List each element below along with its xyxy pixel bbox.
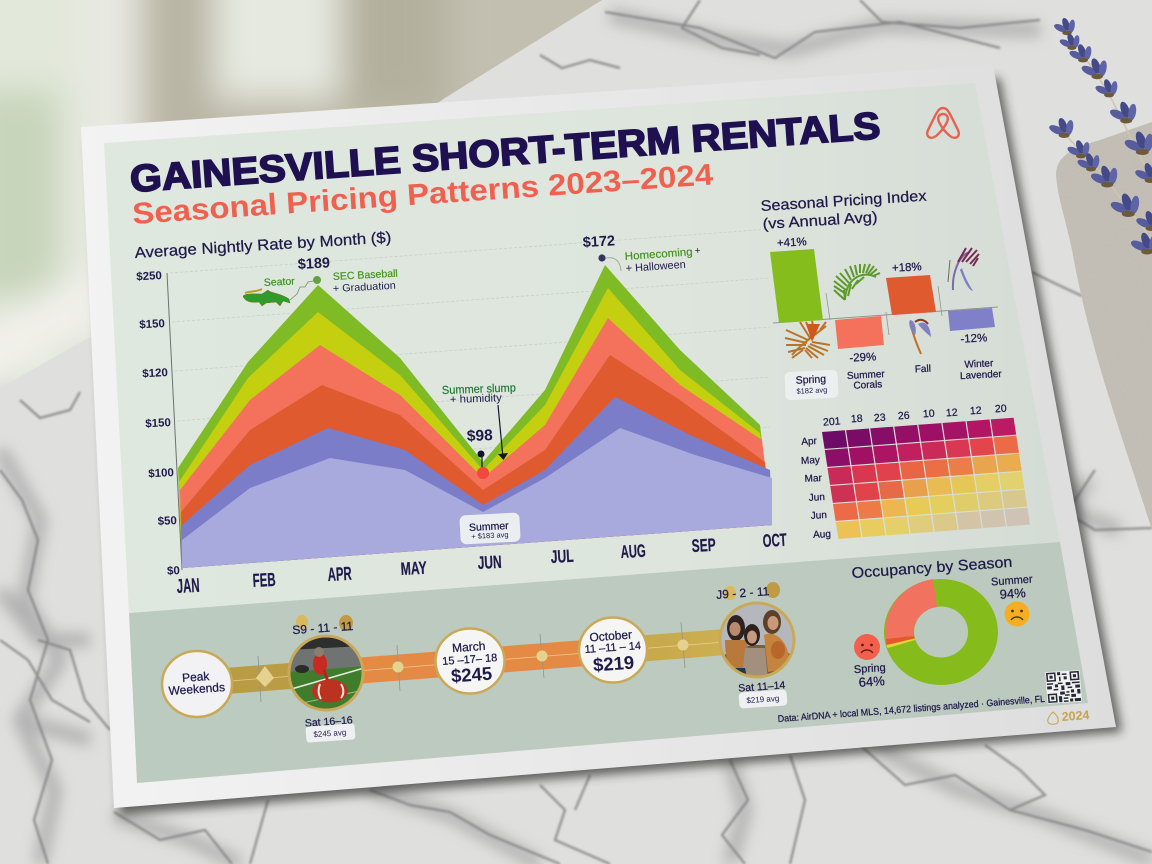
month labels: JUL [550,546,574,567]
date chip: sat 16–16: $245 avg [313,728,347,739]
layer: periwinkle [182,397,772,568]
label: winter lavender [960,358,1003,382]
year badge [1048,708,1090,724]
label: spring chip [784,370,839,400]
annotation: april peak: SEC Baseball [333,268,398,283]
month labels: SEP [691,535,716,556]
label: summer corals: Corals [853,379,883,392]
heatmap row labels [801,436,831,541]
month labels: OCT [762,530,787,551]
y-axis labels [136,270,180,578]
heatmap column labels [823,403,1007,429]
date chip: sat 11–14 [738,679,787,709]
annotation: april peak: Seator [264,275,296,289]
annotation: august peak [582,233,701,275]
bar: fall [886,275,936,315]
heatmap row labels: Aug [813,529,831,541]
icon: fall orchid [909,320,931,354]
icon: lavender feather [948,248,979,291]
peak weekends timeline [162,582,796,743]
background: lavender sprigs [1048,17,1152,254]
subtitle: Seasonal Pricing Patterns 2023–2024 [131,158,714,231]
node: march: 15 –17– 18 [442,652,498,668]
month labels: JAN [176,575,200,598]
poster sheet [81,65,1116,808]
date chip: sat 16–16: Sat 16–16 [304,714,353,730]
year badge: 2024 [1061,708,1090,724]
layer: coral [180,318,772,568]
y-axis labels: $150 [139,318,165,331]
callout: summer [459,512,521,545]
bar value labels: +41% [777,236,807,250]
icon: orange palm [785,321,830,358]
node: peak weekends: Peak [182,669,211,685]
icon: airbnb logo [927,108,959,138]
bar: summer [835,316,884,349]
label: summer occupancy [991,574,1033,626]
label: spring occupancy: 64% [858,673,886,690]
heatmap cells [822,418,1030,539]
bar value labels [777,236,988,365]
label: spring chip: $182 avg [796,385,828,396]
chart heading: seasonal pricing index [760,188,927,233]
y-axis labels: $50 [157,515,177,528]
qr code [1045,670,1082,704]
month labels: AUG [620,541,646,562]
label: spring occupancy [854,634,886,690]
label: summer corals: Summer [847,369,886,382]
annotation: june dip: Summer slump [442,382,516,397]
node: football photo [286,632,366,711]
annotation: june dip: + humidity [450,392,503,406]
node: march: March [452,639,486,655]
annotation: august peak: + Halloween [625,259,686,275]
node: october: $219 [592,652,635,675]
heatmap column labels: 26 [898,410,910,422]
bar: winter [948,308,995,331]
heatmap column labels: 18 [851,413,863,425]
annotation: june dip: $98 [467,427,493,445]
heatmap column labels: 20 [995,403,1007,415]
heatmap [801,403,1030,541]
bar value labels: -29% [849,351,877,365]
date label: friends weekend: J9 - 2 - 11 [716,584,770,602]
donut chart: occupancy by season [884,579,998,685]
callout: summer: Summer [469,520,509,534]
chart heading: seasonal pricing index: (vs Annual Avg) [762,209,878,233]
node: march [436,628,504,694]
label: summer occupancy: 94% [999,585,1027,602]
upper panel background [104,83,1060,613]
date chip: sat 11–14: $219 avg [746,694,780,705]
heatmap column labels: 12 [946,407,958,419]
y-axis labels: $250 [136,270,162,283]
title: GAINESVILLE SHORT-TERM RENTALS [129,105,882,201]
heatmap row labels: Mar [804,473,823,485]
date chip: sat 16–16 [304,714,355,743]
chart heading: average nightly rate: Average Nightly Rate by Month ($) [134,229,392,262]
label: summer corals [847,369,886,392]
y-axis labels: $0 [167,565,180,578]
sheet shadow [90,78,1122,815]
heatmap column labels: 201 [823,415,841,429]
annotation: april peak [264,255,398,295]
bar value labels: -12% [960,332,988,346]
node: peak weekends [162,651,232,717]
layer: orange [181,355,772,568]
month labels: MAY [400,558,427,579]
heatmap row labels: Apr [801,436,818,448]
lower panel background [129,542,1088,783]
annotation: april peak: + Graduation [333,280,396,295]
heatmap row labels: May [801,455,820,467]
annotation: april peak: $189 [297,255,330,273]
icon: green palm [834,264,880,300]
heatmap row labels: Jun [810,510,827,522]
label: fall: Fall [915,364,931,375]
heatmap column labels: 12 [970,405,982,417]
y-axis labels: $100 [148,467,174,480]
data source: Data: AirDNA + local MLS, 14,672 listings analyzed · Gainesville, FL [777,694,1045,725]
node: march: $245 [450,663,493,686]
callout: summer: + $183 avg [471,530,509,541]
chart heading: seasonal pricing index: Seasonal Pricing Index [760,188,927,215]
month labels: JUN [477,552,502,573]
heatmap column labels: 23 [874,412,886,424]
y-axis labels: $120 [142,367,168,380]
label: winter lavender: Winter [964,358,994,371]
bar value labels: +18% [892,261,922,275]
month labels [176,530,787,598]
node: peak weekends: Weekends [168,680,225,698]
timeline markers [256,640,688,687]
background: linen cloth [1050,115,1152,535]
area chart: average nightly rate by month [136,229,787,598]
annotation: august peak: $172 [582,233,615,251]
layer: yellow-green [179,288,772,568]
heatmap row labels: Jun [808,492,825,504]
label: spring occupancy: Spring [854,662,886,676]
node: october: October [589,628,633,644]
icon: gator [243,281,313,306]
date chip: sat 11–14: Sat 11–14 [738,679,786,695]
layer: green [178,265,772,568]
bar: spring [770,249,823,323]
month labels: APR [327,564,352,586]
timeline band [225,629,727,694]
annotation: june dip [442,382,516,479]
heatmap column labels: 10 [923,408,935,420]
icon: worried face [1004,602,1030,626]
grid lines and axis [167,229,770,570]
node: friends photo [718,602,796,682]
label: spring chip: Spring [795,373,826,387]
icon: sad face [854,634,880,660]
label: summer occupancy: Summer [991,574,1033,588]
label: winter lavender: Lavender [960,369,1003,382]
node: october: 11 –11 – 14 [584,640,641,656]
month labels: FEB [252,570,276,592]
chart heading: occupancy by season: Occupancy by Season [851,554,1013,582]
node: october [579,618,647,682]
bar chart: seasonal pricing index [770,236,1003,400]
annotation: august peak: Homecoming [624,246,693,263]
annotation: august peak: + [694,246,701,257]
y-axis labels: $150 [145,417,171,430]
layer: lavender [182,428,772,568]
date label: football weekend: S9 - 11 - 11 [292,619,354,637]
